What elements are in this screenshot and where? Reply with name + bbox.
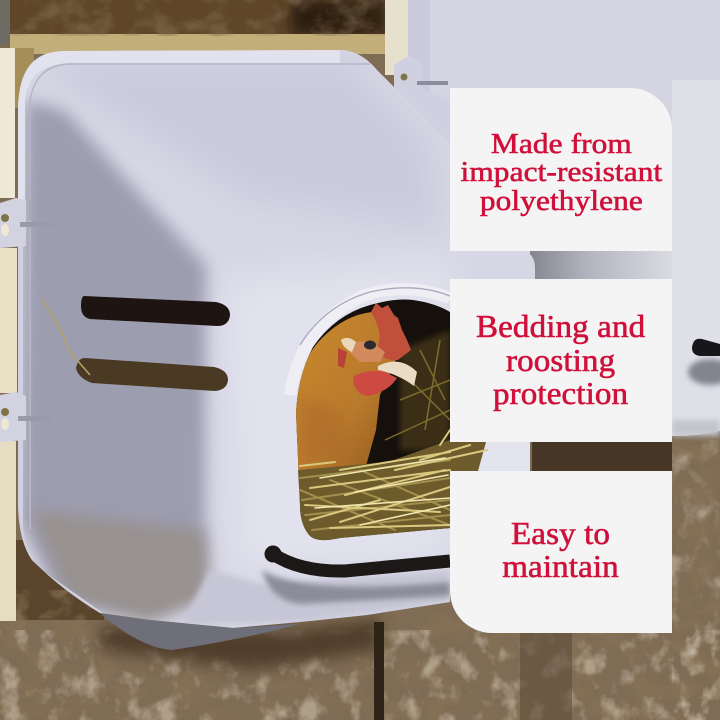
entrance ring [290, 289, 450, 395]
entrance opening [296, 300, 450, 540]
card text: impact-resistant [460, 156, 662, 188]
card text: Made from [490, 128, 631, 160]
card: maintain [450, 471, 672, 633]
right nest box [394, 0, 720, 436]
card text [502, 516, 619, 584]
floor shadow patch [100, 613, 300, 650]
mounting brackets [0, 198, 52, 442]
card text: maintain [503, 549, 619, 584]
rim highlight [18, 56, 340, 200]
straw bedding [298, 430, 487, 540]
hen [296, 303, 417, 472]
card: polyethylene [450, 88, 672, 251]
black perch lip [273, 554, 450, 571]
posts [0, 48, 15, 198]
ventilation slots [42, 296, 230, 391]
card text: polyethylene [479, 185, 643, 217]
card: protection [450, 279, 672, 442]
sun and shadow shading [20, 100, 207, 615]
card text: protection [493, 376, 629, 411]
card text: Bedding and [476, 309, 646, 344]
card text: roosting [506, 343, 616, 378]
main nest box [0, 50, 535, 650]
card text [460, 128, 662, 217]
card text [476, 309, 646, 412]
card text: Easy to [511, 516, 611, 550]
